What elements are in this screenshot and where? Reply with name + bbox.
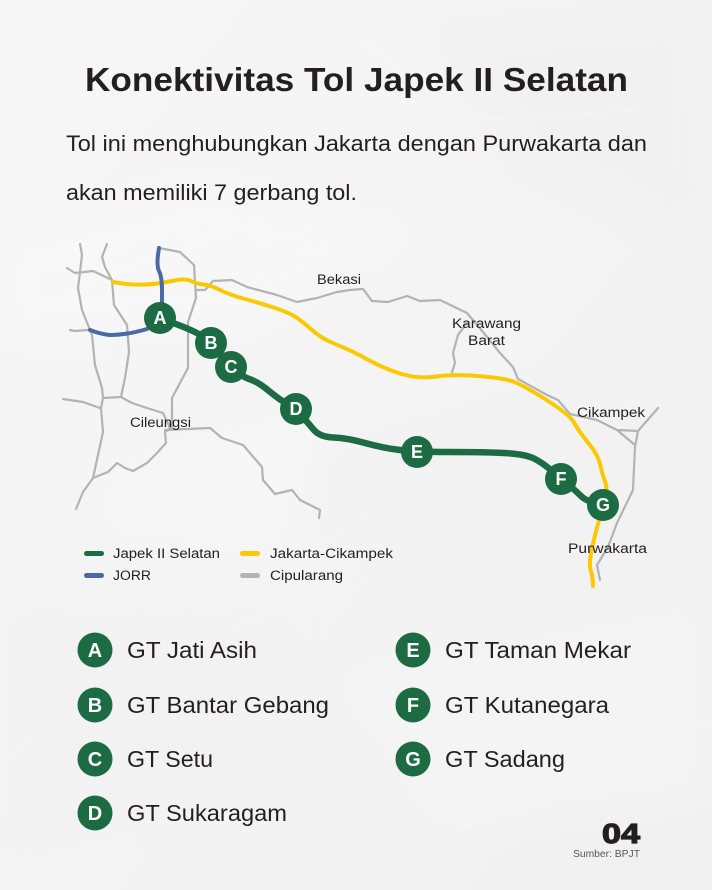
gate C — [78, 742, 213, 776]
legend: Cipularang — [270, 568, 343, 583]
toll gate list — [78, 632, 631, 830]
gate A: GT Jati Asih — [127, 637, 257, 663]
Japek II Selatan green road — [160, 318, 603, 505]
Jakarta-Cikampek yellow road — [113, 280, 607, 586]
gate D: GT Sukaragam — [127, 800, 287, 826]
gate E: E — [406, 640, 420, 662]
legend: Japek II Selatan — [113, 546, 220, 561]
map place labels: Bekasi — [317, 272, 361, 287]
gate C: C — [88, 749, 102, 771]
gate B: B — [88, 695, 102, 717]
map toll gate markers: G — [596, 495, 610, 515]
JORR blue road — [90, 248, 162, 335]
title: Konektivitas Tol Japek II Selatan — [85, 61, 628, 98]
gate F — [396, 688, 609, 722]
map toll gate markers: C — [224, 357, 238, 377]
Cipularang gray roads — [63, 244, 658, 580]
gate F: F — [407, 695, 419, 717]
map place labels: Purwakarta — [568, 541, 648, 556]
map — [63, 244, 658, 586]
map toll gate markers: A — [154, 308, 166, 328]
gate F: GT Kutanegara — [445, 692, 609, 718]
map place labels: Cikampek — [577, 405, 645, 420]
page number: 04 — [602, 818, 641, 849]
gate C: GT Setu — [127, 746, 213, 772]
map toll gate markers: B — [204, 333, 218, 353]
map toll gate markers — [144, 302, 619, 521]
gate D — [78, 796, 287, 830]
map toll gate markers: D — [290, 399, 302, 419]
gate A — [78, 632, 257, 668]
map place labels — [130, 272, 648, 556]
gate G: GT Sadang — [445, 746, 565, 772]
gate G — [396, 742, 565, 776]
legend: JORR — [113, 568, 151, 583]
map toll gate markers: F — [556, 469, 566, 489]
intro text — [66, 131, 647, 205]
map place labels: Cileungsi — [130, 415, 191, 430]
map toll gate markers: E — [411, 442, 423, 462]
gate E — [396, 632, 631, 668]
map place labels: Karawang — [452, 316, 521, 331]
gate B: GT Bantar Gebang — [127, 692, 329, 718]
gate E: GT Taman Mekar — [445, 637, 631, 663]
gate G: G — [405, 749, 421, 771]
gate D: D — [88, 803, 102, 825]
map place labels: Barat — [468, 333, 505, 348]
legend: Jakarta-Cikampek — [270, 546, 393, 561]
gate B — [78, 688, 329, 722]
legend — [84, 546, 393, 583]
source note: Sumber: BPJT — [573, 848, 641, 860]
intro text: Tol ini menghubungkan Jakarta dengan Purwakarta dan — [66, 131, 647, 156]
intro text: akan memiliki 7 gerbang tol. — [66, 180, 357, 205]
gate A: A — [88, 640, 102, 662]
